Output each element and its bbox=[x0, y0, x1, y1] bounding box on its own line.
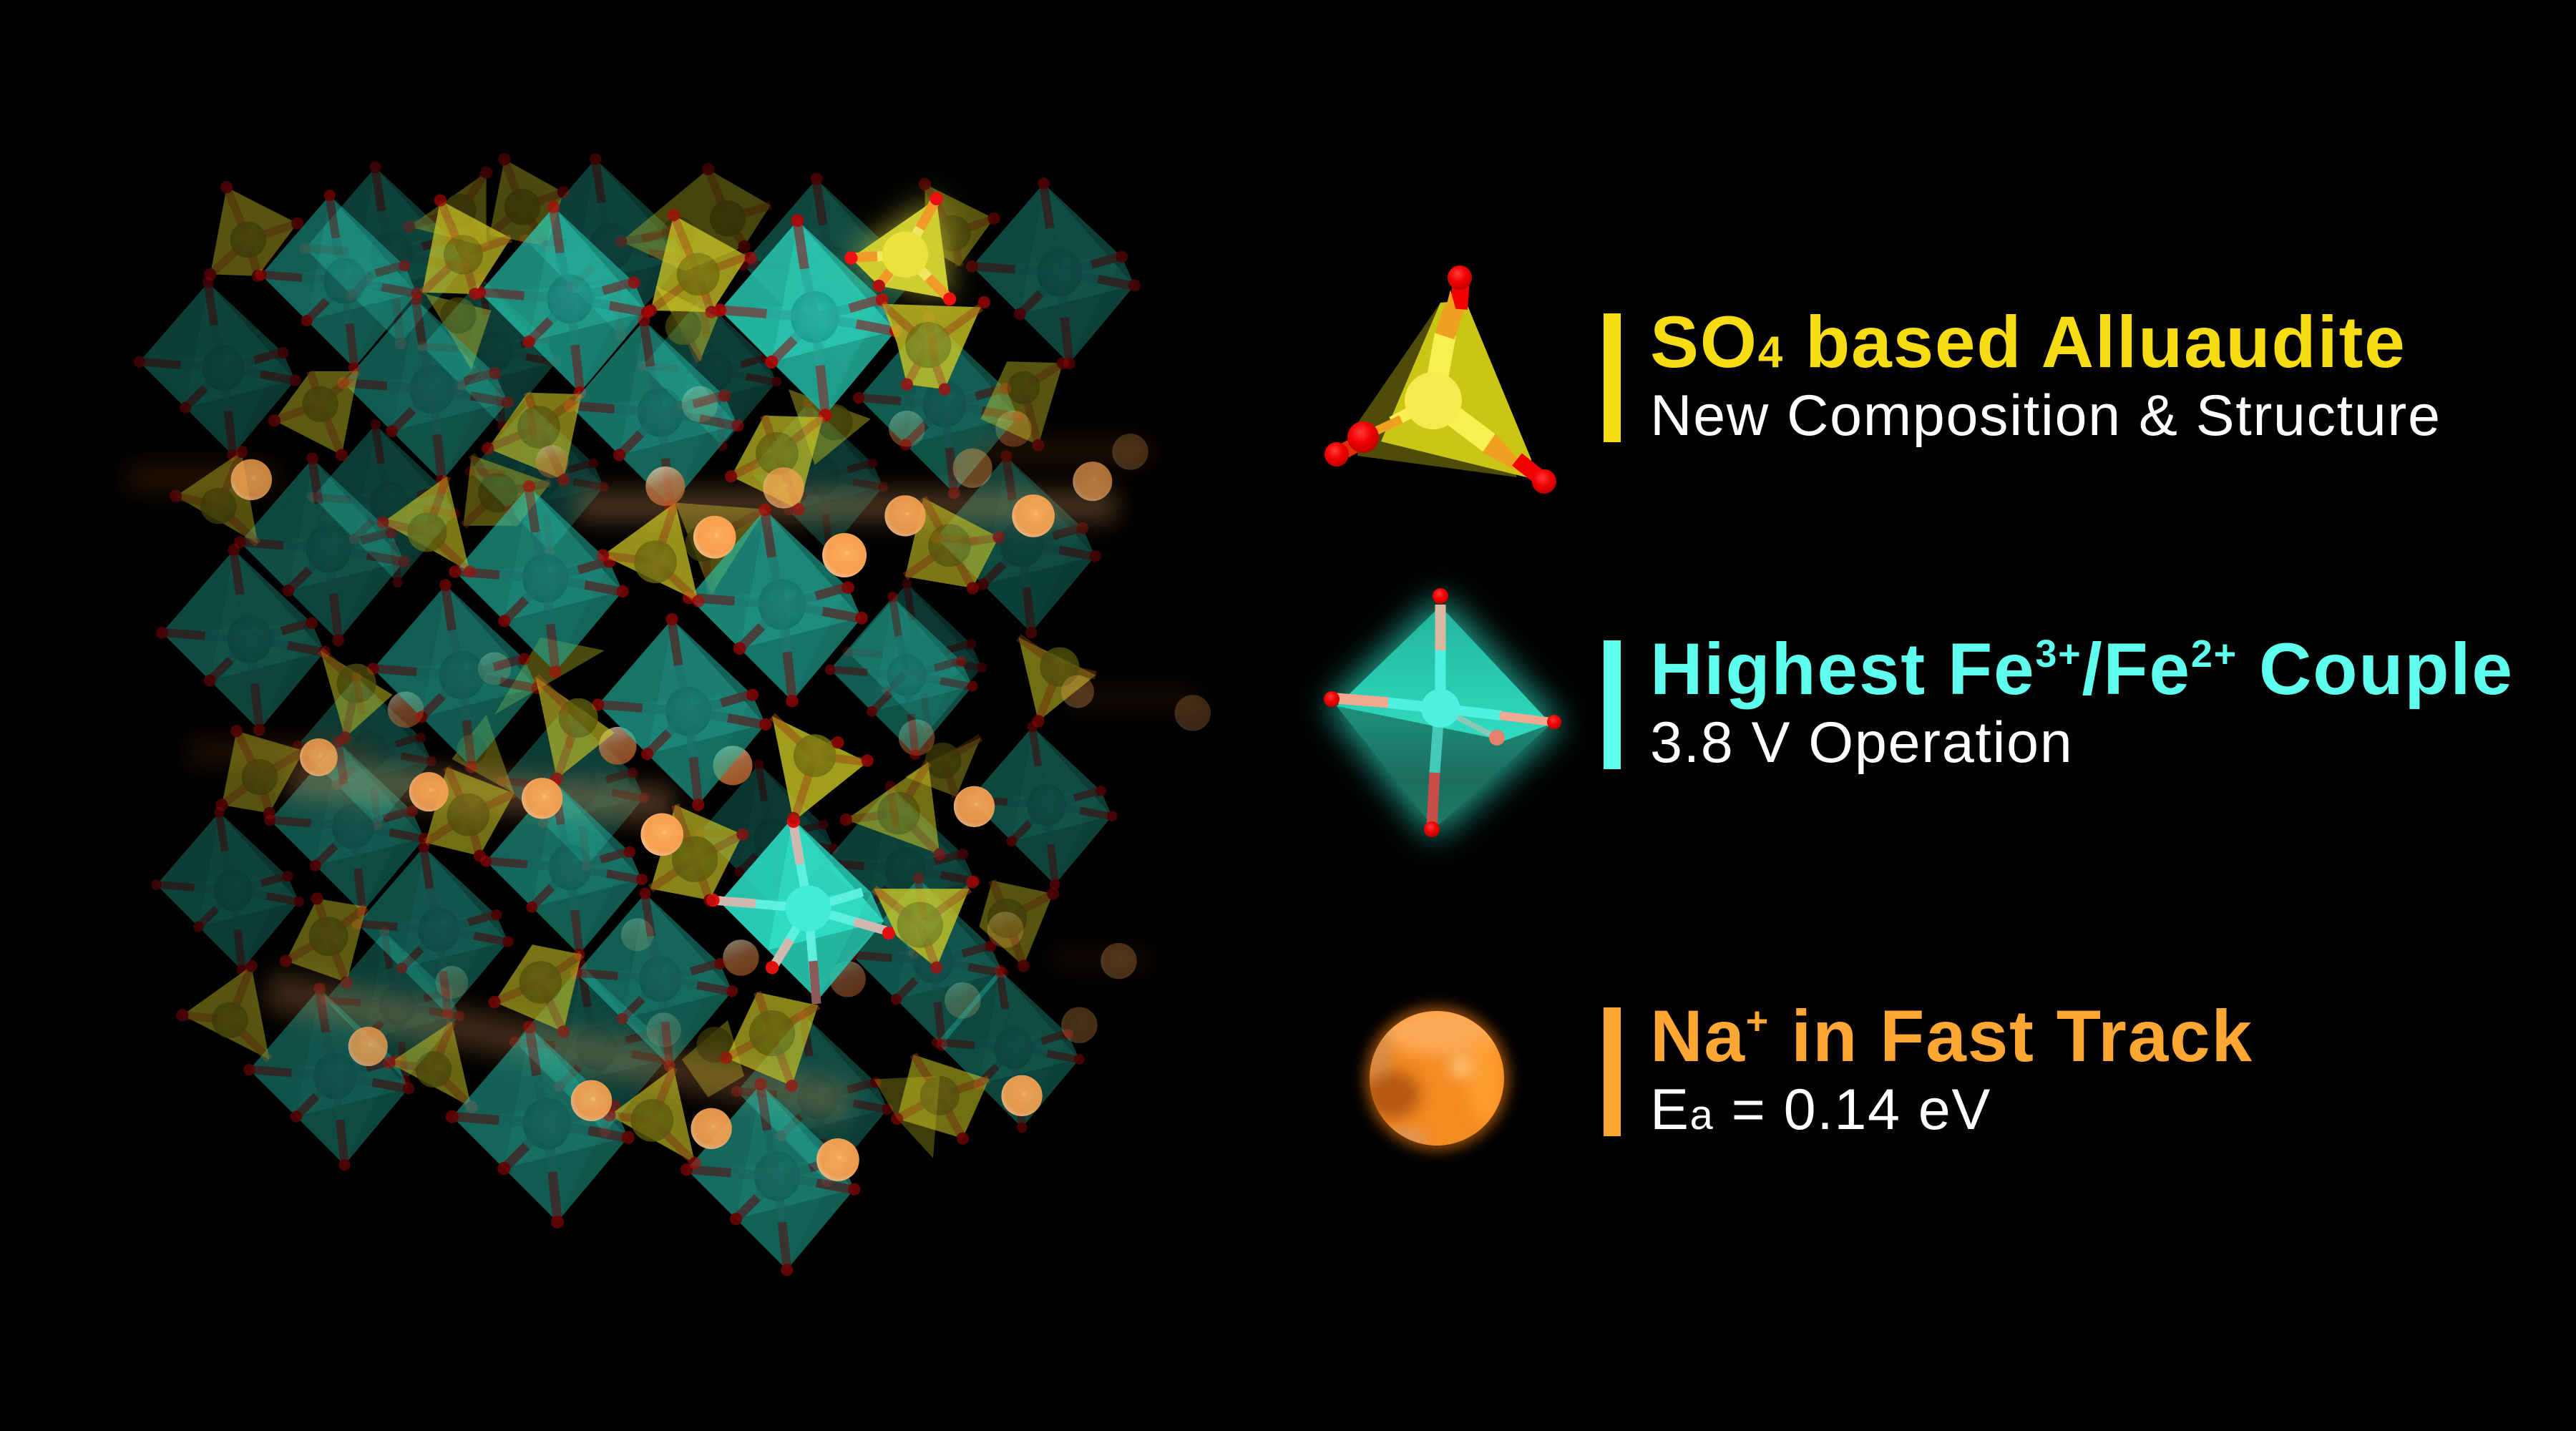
main layer octahedra bbox=[140, 183, 1135, 1165]
heading text: Na bbox=[1650, 995, 1746, 1077]
hidden sodium ions behind the framework bbox=[388, 386, 1032, 1047]
legend heading: SO4 based Alluaudite bbox=[1604, 301, 2441, 448]
highlighted iron octahedron bbox=[713, 819, 889, 1004]
sodium ions bbox=[231, 434, 1211, 1181]
front layer octahedra bbox=[452, 207, 896, 1270]
sodium fast-track glow streaks bbox=[128, 440, 1199, 1122]
heading text: in Fast Track bbox=[1770, 995, 2253, 1077]
legend item: sulfate tetrahedron icon bbox=[1324, 265, 1556, 494]
legend heading: Highest Fe3+/Fe2+ Couple bbox=[1604, 628, 2514, 775]
subheading text: New Composition & Structure bbox=[1650, 384, 2441, 448]
glowing sulfate tetrahedron bbox=[851, 199, 950, 299]
accent bar: yellow bbox=[1604, 313, 1621, 442]
heading text: 3+ bbox=[2035, 633, 2082, 675]
heading text: /Fe bbox=[2082, 628, 2191, 710]
heading text: + bbox=[1746, 1000, 1770, 1042]
main layer tetrahedra bbox=[176, 187, 1096, 1138]
legend item: iron octahedron icon bbox=[1324, 588, 1561, 837]
front layer tetrahedra bbox=[383, 200, 999, 1163]
legend item: sodium ion icon bbox=[1363, 1005, 1510, 1150]
accent bar: orange bbox=[1604, 1007, 1621, 1136]
heading text: SO4 based Alluaudite bbox=[1650, 301, 2406, 383]
heading text: Highest Fe bbox=[1650, 628, 2035, 710]
back layer octahedra bbox=[298, 159, 982, 1181]
subheading text: 3.8 V Operation bbox=[1650, 710, 2073, 775]
crystal structure illustration bbox=[128, 159, 1211, 1270]
back layer tetrahedra bbox=[409, 160, 994, 1158]
accent bar: cyan bbox=[1604, 640, 1621, 769]
heading text: 2+ bbox=[2191, 633, 2238, 675]
heading text: Couple bbox=[2238, 628, 2514, 710]
legend heading: Na+ in Fast Track bbox=[1604, 995, 2253, 1142]
subheading text: Ea = 0.14 eV bbox=[1650, 1078, 1991, 1142]
